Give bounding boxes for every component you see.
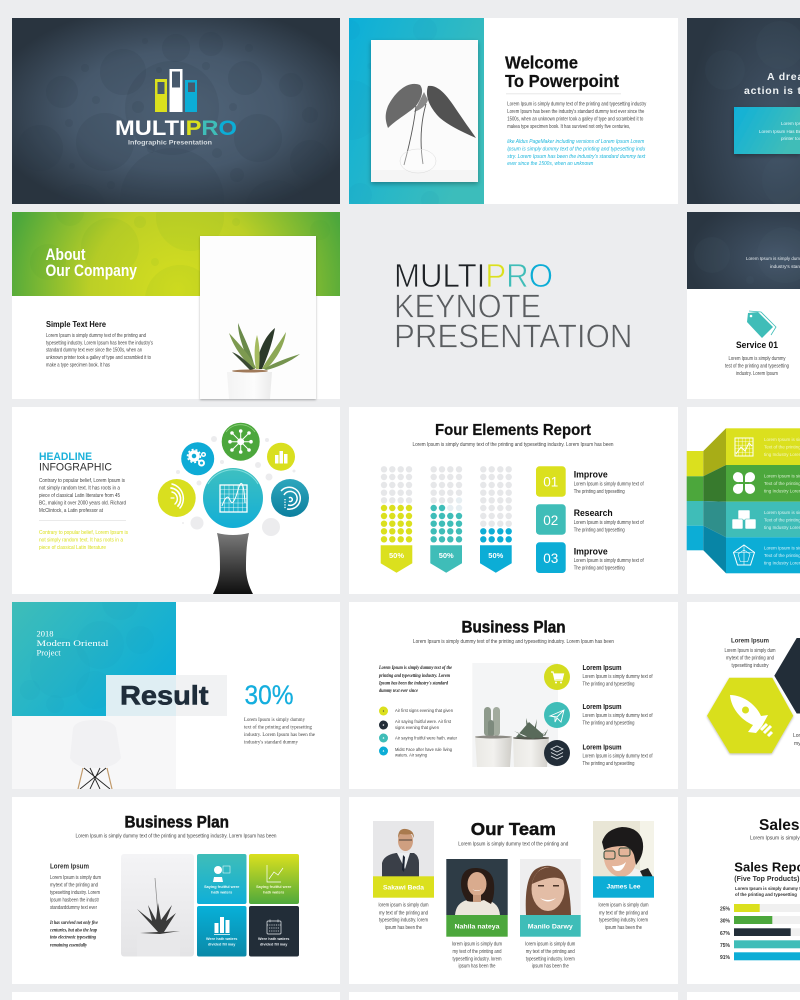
bar chart: 67% [720, 931, 731, 937]
item 01: Improve [574, 470, 608, 481]
tile: people: Saying fruitful were [204, 885, 239, 889]
item 01 [536, 466, 644, 497]
project title: 2018 [36, 629, 54, 639]
italic blue text: like Aldus PageMaker including versions of Lorem Ipsum Lorem [507, 139, 644, 145]
heading: INFOGRAPHIC [39, 462, 112, 474]
body text: 1500s, when an unknown printer took a galley of type and scrambled it to [507, 116, 643, 122]
body text: typesetting industry. Lorem Ipsum has been the industry's [46, 340, 153, 346]
photo: white chair [70, 720, 121, 789]
tile: calendar [249, 906, 299, 956]
list item one: Lorem Ipsum is simply dummy text of [582, 674, 653, 680]
yellow text [39, 530, 128, 551]
team card: Manilo Darwy: typesetting industry. lorem [526, 956, 575, 962]
title: Business Plan [462, 618, 566, 637]
logo tagline: Infographic Presentation [128, 140, 212, 146]
photo: leaf in vase [371, 40, 478, 182]
ribbon band: cubes [726, 502, 800, 537]
list item three: The printing and typesetting [582, 761, 635, 767]
team card: James Lee: lorem ipsum is simply dum [598, 903, 648, 909]
stat description: industry. Lorem Ipsum has been the [244, 733, 316, 738]
slide: folded ribbons (cut off) [687, 407, 800, 594]
icon circle: paper plane [544, 702, 570, 728]
team card: Nahila nateya: Nahila nateya [454, 923, 500, 930]
logo bars [155, 69, 197, 112]
report text: of the printing and typesetting [735, 892, 797, 897]
tile: people: hath waters [211, 890, 232, 894]
italic intro [378, 666, 453, 694]
project title: Project [36, 647, 61, 657]
slide: hexagons (cut off) [687, 602, 800, 789]
list item one: Lorem Ipsum [582, 665, 622, 672]
body text: unknown printer took a galley of type and scrambled it to [46, 355, 151, 361]
numbered list: 4 [383, 749, 385, 753]
title: Multipro Keynote Presentation: KEYNOTE [394, 288, 541, 324]
italic text block [49, 921, 99, 948]
numbered list: Air first signs evening that given [395, 708, 453, 713]
quote box [734, 107, 800, 154]
text block: typesetting industry. Lorem [50, 890, 100, 896]
photo: black succulent [121, 854, 194, 957]
tree node: radar [271, 479, 309, 517]
ribbon folds [703, 428, 726, 573]
team card: James Lee: typesetting industry. lorem [599, 918, 648, 924]
slide: Our Team [349, 797, 678, 984]
title: Business Plan [124, 812, 229, 831]
team card: Nahila nateya: my text of the printing and [452, 949, 502, 955]
dot chart: column two: 50% [439, 551, 454, 560]
text block: standarddummy text ever [50, 905, 97, 911]
left ribbon panels [687, 451, 703, 550]
slide: Service (cut off) [687, 212, 800, 399]
bar chart: 91% [720, 955, 731, 961]
body text: standard dummy text ever since the 1500s, when an [46, 348, 142, 354]
dot chart: column three [480, 466, 512, 573]
item 02: 02 [543, 513, 558, 528]
tile: line chart [249, 854, 299, 904]
tree decoration dots [176, 436, 296, 536]
tree node: signal [158, 479, 196, 517]
body text: McClintock, a Latin professor at [39, 508, 104, 514]
report subheading: (Five Top Products) [734, 876, 800, 883]
item 03 [536, 542, 644, 573]
tree node: gears [181, 442, 214, 475]
service text: test of the printing and typesetting [725, 364, 789, 370]
bar chart: 30% [720, 919, 731, 925]
item 01: The printing and typesetting [574, 489, 625, 495]
italic blue text: stry. Lorem Ipsum has been the industry's standard dummy text [507, 154, 646, 160]
numbered list: 1 [383, 709, 385, 713]
team card: Sakawi Beda: typesetting industry. lorem [379, 918, 428, 924]
text block: Lorem Ipsum is simply dum [50, 875, 101, 881]
project title: Modern Oriental [36, 638, 109, 648]
tile: bar chart: divided fill may [208, 942, 236, 946]
item 02: Lorem Ipsum is simply dummy text of [574, 520, 644, 526]
service text: Lorem Ipsum is simply dummy [728, 356, 786, 362]
italic blue text [507, 139, 646, 167]
yellow text: not simply random text. It has roots in a [39, 538, 123, 544]
item 02 [536, 504, 644, 535]
item 02: Research [574, 508, 613, 519]
numbered list: waters. Air saying [395, 752, 427, 758]
team card: James Lee: my text of the printing and [599, 910, 648, 916]
stat description [244, 718, 316, 746]
slide: quote (cut off) [687, 18, 800, 208]
quote heading [744, 71, 800, 97]
team card: Sakawi Beda: lorem ipsum is simply dum [378, 903, 428, 909]
dot chart: column one: 50% [389, 551, 404, 560]
tile: bar chart: Were hath waters [206, 937, 237, 941]
stat description: industry's standard dummy [244, 740, 298, 746]
list item one [582, 665, 653, 688]
body text [39, 478, 126, 514]
numbered list: Midst Face after have rule living [395, 747, 452, 752]
slide: Four Elements Report [349, 407, 678, 594]
slide: About Our Company [12, 212, 340, 402]
tile: bar chart [197, 906, 246, 956]
photo: cactus and succulent pots [472, 663, 558, 767]
list item two [582, 704, 653, 726]
yellow hexagon with rocket [707, 678, 793, 753]
list item two: Lorem Ipsum is simply dummy text of [582, 713, 653, 719]
dot chart: column one [381, 466, 412, 573]
ribbon band: clover [726, 465, 800, 502]
team card: Nahila nateya: lorem ipsum is simply dum [452, 941, 502, 947]
item 02: The printing and typesetting [574, 527, 625, 533]
ribbon band: chart: Text of the printing [764, 444, 800, 450]
body text [507, 102, 647, 130]
team card: James Lee: James Lee [606, 884, 641, 891]
italic text block: centuries, but also the leap [50, 928, 97, 933]
stat description: text of the printing and typesetting [244, 726, 312, 730]
team card: Manilo Darwy: ipsum has been the [532, 964, 569, 970]
heading [39, 451, 112, 474]
italic intro: printing and typesetting industry. Lorem [378, 674, 450, 679]
item 03: The printing and typesetting [574, 566, 625, 572]
body text: make a type specimen book. It has [46, 362, 110, 368]
slide: Welcome [349, 18, 678, 204]
text block: Lorem Ipsum is simply dum [724, 648, 776, 654]
slide: Business Plan with tiles [12, 797, 340, 984]
italic intro: Lorem Ipsum is simply dummy text of the [378, 666, 453, 671]
Result banner [106, 675, 227, 716]
lower text fragment [793, 733, 800, 747]
subtitle: Lorem Ipsum is simply dummy text of the printing and typesetting industry. Lorem Ipsum has been [412, 442, 614, 448]
team card: Manilo Darwy: Manilo Darwy [528, 923, 573, 930]
tile: people [197, 854, 246, 904]
stat: 30%: 30% [244, 680, 294, 710]
text block: mytext of the printing and [726, 656, 774, 662]
stat description: Lorem Ipsum is simply dummy [244, 718, 305, 723]
slide: Sales report (cut off) [687, 797, 800, 984]
team card: Manilo Darwy: lorem ipsum is simply dum [525, 941, 575, 947]
title: Multipro Keynote Presentation: PRESENTATION [394, 318, 632, 354]
bar chart [720, 904, 800, 961]
text block [50, 875, 101, 911]
body text: Contrary to popular belief, Lorem Ipsum is [39, 478, 125, 484]
numbered list: 2 [383, 723, 385, 727]
item 01: Lorem Ipsum is simply dummy text of [574, 482, 644, 488]
item 03: Lorem Ipsum is simply dummy text of [574, 558, 644, 564]
ribbon band: chart [726, 428, 800, 465]
tile: line chart: hath waters [263, 890, 284, 894]
ribbon band: cubes: Text of the printing [764, 518, 800, 522]
heading: To Powerpoint [505, 71, 619, 91]
ribbon band: pentagon: Text of the printing [764, 553, 800, 558]
yellow text: piece of classical Latin literature [39, 545, 106, 551]
italic intro: Ipsum has been the industry's standard [378, 682, 448, 686]
heading [46, 245, 137, 280]
body text: makea type specimen book. It has survived not only five centuries, [507, 124, 630, 130]
service text: industry. Lorem Ipsum [736, 371, 778, 377]
slide: Result [12, 584, 340, 789]
tree trunk [213, 533, 253, 594]
team card: Sakawi Beda [373, 821, 434, 931]
tree node: network [222, 423, 260, 461]
tile: calendar: Were hath waters [258, 937, 289, 941]
body text [46, 333, 153, 368]
service heading: Service 01 [736, 340, 779, 351]
heading: HEADLINE [39, 451, 92, 463]
body text: BC, making it over 2000 years old. Richard [39, 500, 126, 506]
numbered list: signs evening that given [395, 725, 439, 730]
item 03: Improve [574, 546, 608, 557]
team card: Manilo Darwy [520, 859, 581, 970]
subheading: Simple Text Here [46, 319, 106, 329]
italic text block: into electronic typesetting [50, 936, 96, 941]
team card: Manilo Darwy: my text of the printing and [526, 949, 575, 955]
yellow text: Contrary to popular belief, Lorem Ipsum is [39, 530, 128, 536]
numbered list: 3 [383, 736, 385, 740]
body text: piece of classical Latin literature from 45 [39, 493, 120, 499]
icon circle: layers [544, 740, 570, 766]
title: Four Elements Report [435, 422, 591, 439]
list item three: Lorem Ipsum is simply dummy text of [582, 754, 653, 760]
ribbon band: pentagon [726, 537, 800, 573]
italic blue text: Ipsum is simply dummy text of the printing and typesetting indu [507, 146, 646, 152]
dot chart: column three: 50% [488, 551, 504, 560]
heading: About [46, 245, 86, 264]
icon circle: cart [544, 664, 570, 690]
italic blue text: ever since the 1500s, when an unknown [507, 161, 594, 167]
team card: James Lee: ipsum has been the [605, 925, 642, 931]
heading: Welcome [505, 52, 578, 72]
heading: Lorem Ipsum [50, 864, 89, 871]
italic text block: remaining essentially [50, 943, 88, 948]
item 01: 01 [543, 475, 558, 490]
subtitle: Lorem Ipsum is simply dummy text of the printing and typesetting industry. Lorem Ipsum has been [76, 834, 277, 840]
text block: Ipsum hasbeen the industr [50, 898, 99, 904]
report text [735, 886, 800, 897]
ribbon band: clover: Text of the printing [764, 481, 800, 486]
team card: Nahila nateya [446, 859, 508, 970]
body text: not simply random text. It has roots in a [39, 486, 120, 492]
body text: Lorem Ipsum is simply dummy text of the printing and [46, 333, 146, 339]
tree node: chart [203, 468, 263, 528]
service text [725, 356, 789, 377]
heading: Our Company [46, 261, 137, 280]
slide: Headline Infographic tree [12, 407, 340, 594]
header text: industry's stan [770, 264, 800, 270]
numbered list [379, 706, 457, 758]
icon: price tag [747, 311, 776, 338]
tree node: bars [267, 443, 295, 471]
title: Our Team [471, 819, 556, 839]
dark hexagon [774, 638, 800, 714]
Result banner: Result [120, 680, 209, 710]
text block: mytext of the printing and [50, 883, 98, 889]
title: Multipro Keynote Presentation [394, 257, 632, 354]
list item two: The printing and typesetting [582, 720, 635, 726]
heading: Lorem Ipsum [731, 637, 769, 644]
team card: James Lee [593, 821, 654, 931]
tile: calendar: divided fill may [260, 942, 288, 946]
slide: MultiPro cover [12, 18, 340, 204]
list item three: Lorem Ipsum [582, 744, 622, 752]
subtitle: Lorem Ipsum is simply dummy text of the printing and [458, 841, 568, 847]
bar chart: 75% [720, 943, 731, 949]
dot chart: column two [430, 466, 462, 573]
body text: Lorem Ipsum has been the industry's standard dummy text ever since the [507, 109, 644, 115]
next slide row (cropped) [12, 992, 800, 1000]
list item two: Lorem Ipsum [582, 704, 622, 711]
project title [36, 629, 109, 657]
slide: Business Plan with plants [349, 602, 678, 789]
list item one: The printing and typesetting [582, 682, 635, 688]
numbered list: Air saying fruitful were hath. water [395, 736, 457, 740]
tile: line chart: Saying fruitful were [256, 885, 291, 889]
heading [505, 52, 619, 91]
team card: Nahila nateya: ipsum has been the [458, 964, 496, 970]
italic intro: dummy text ever since [379, 689, 419, 694]
numbered list: Air saying fruitful were. Air first [395, 719, 452, 724]
subtitle: Lorem Ipsum is simply dummy text of the printing and typesetting industry. Lorem Ipsum has been [413, 639, 614, 645]
item 03: 03 [543, 551, 558, 566]
italic text block: It has survived not only five [49, 921, 99, 926]
team card: Sakawi Beda: ipsum has been the [385, 925, 422, 931]
bar chart: 25% [720, 907, 731, 913]
team card: Nahila nateya: typesetting industry. lorem [452, 956, 502, 962]
team card: Sakawi Beda: Sakawi Beda [383, 884, 424, 891]
logo wordmark: MULTI PRO [115, 117, 237, 140]
team card: Sakawi Beda: my text of the printing and [379, 910, 428, 916]
body text: Lorem Ipsum is simply dummy text of the printing and typesetting industry [507, 102, 647, 108]
photo: succulent in white pot [200, 236, 316, 399]
list item three [582, 744, 653, 767]
text block: typesetting industry [732, 663, 769, 669]
title: Multipro Keynote Presentation: MULTIPRO [394, 257, 553, 294]
header text [746, 256, 800, 270]
text block [724, 648, 776, 669]
